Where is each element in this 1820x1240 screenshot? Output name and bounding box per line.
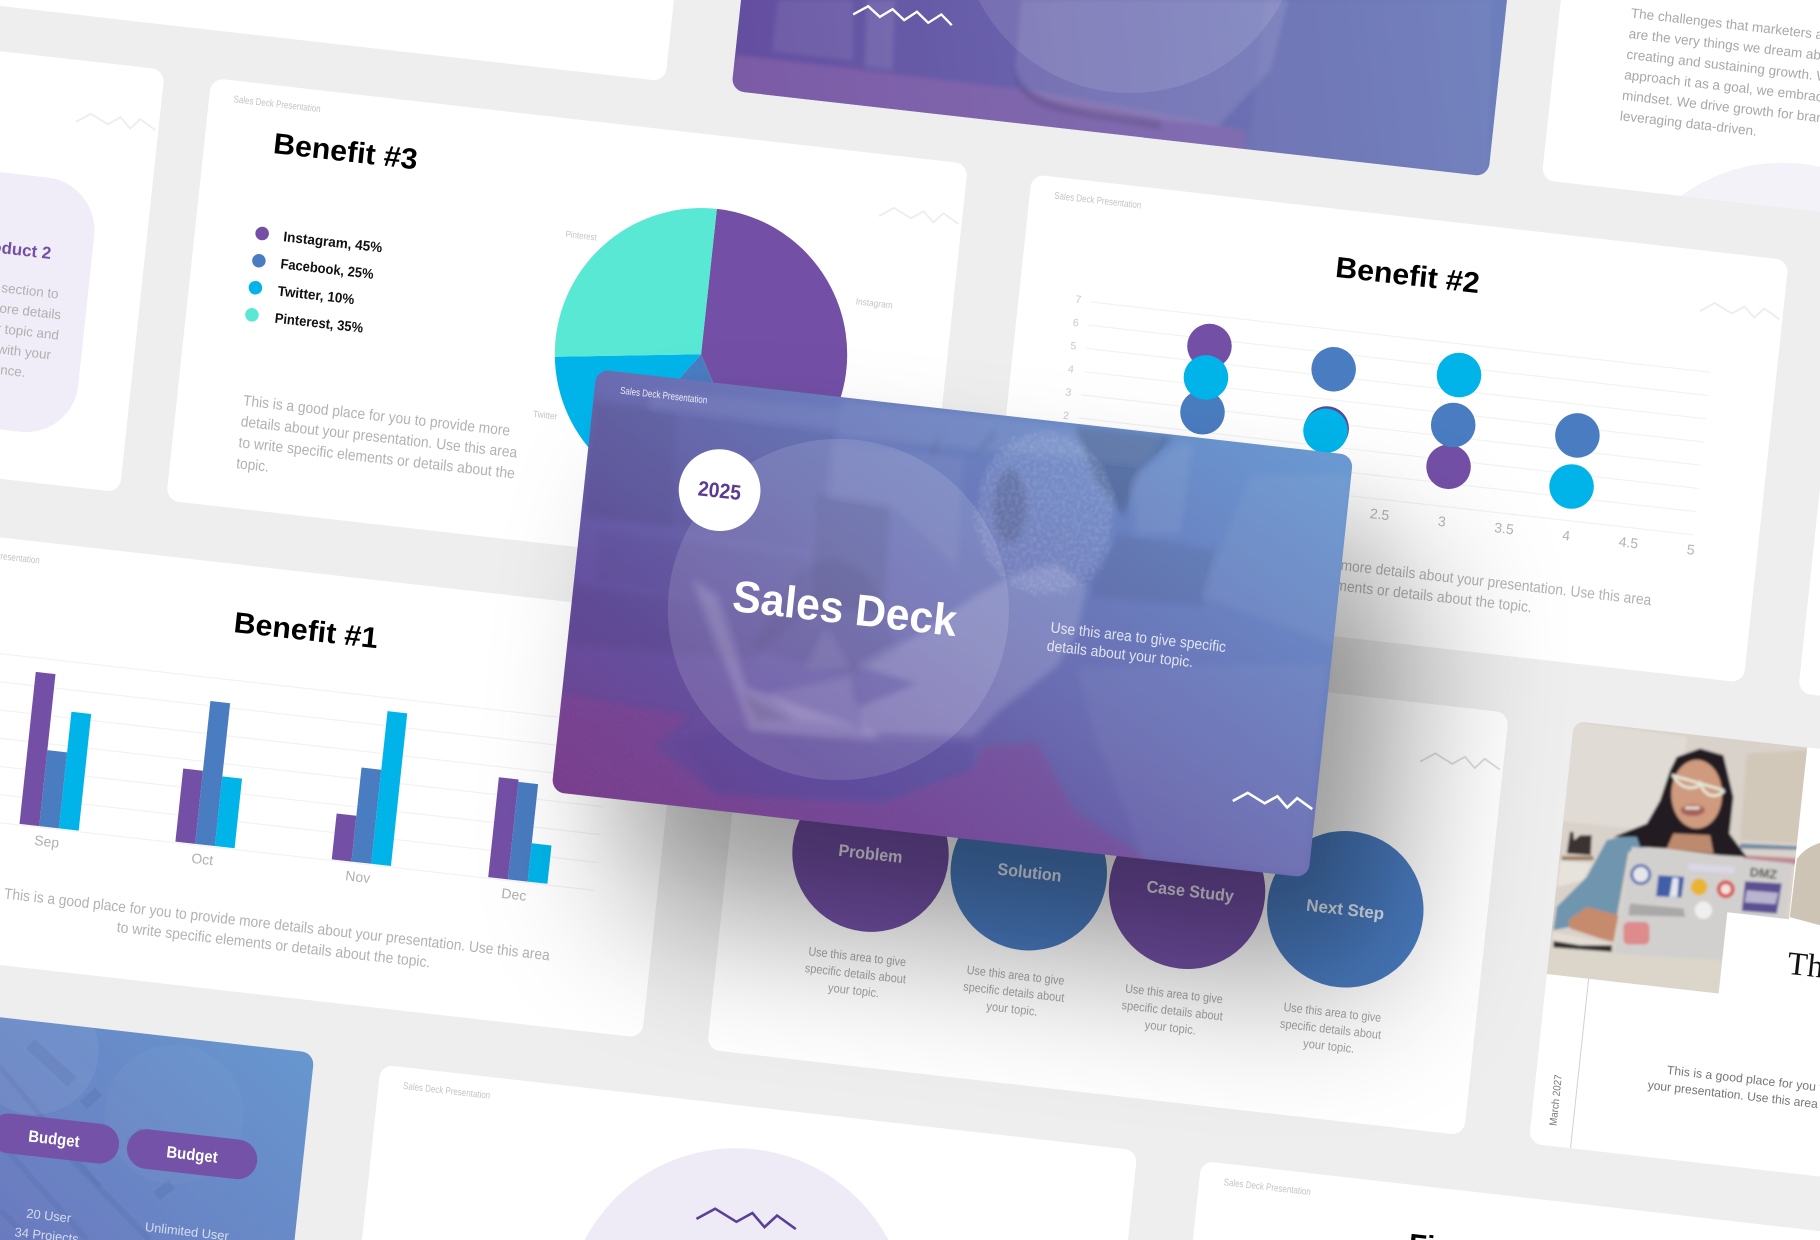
y axis labels: 4: [1067, 363, 1075, 376]
slide: team card base: [1529, 721, 1820, 1229]
team paragraph: [1647, 1061, 1820, 1113]
plant leaves: [930, 420, 998, 464]
big translucent circle: [668, 439, 1009, 780]
carpet tone: [552, 696, 1141, 858]
legend: [244, 225, 384, 337]
legend: Instagram, 45%: [283, 228, 384, 255]
x axis labels: 2.5: [1369, 505, 1390, 523]
zigzag: [76, 112, 156, 131]
x axis labels: 3.5: [1494, 519, 1515, 537]
subtitle: details about your topic.: [1046, 638, 1194, 671]
laptop: [693, 580, 878, 739]
paragraph: to write specific elements or details about the: [238, 434, 516, 483]
pie chart: [533, 208, 893, 500]
purple zigzag: [696, 1207, 797, 1231]
paragraph: [235, 392, 521, 503]
zigzag: [879, 206, 960, 225]
body text: leveraging data-driven.: [1619, 108, 1758, 139]
captions: your topic.: [827, 981, 880, 1000]
sofa cushions: [597, 531, 807, 613]
legend: Pinterest, 35%: [274, 310, 364, 336]
captions: your topic.: [1302, 1036, 1355, 1056]
lilac circle: [548, 1130, 926, 1240]
slide: top photo card: [720, 0, 1533, 177]
captions: Use this area to give: [1125, 981, 1224, 1006]
circle: case study: Case Study: [1146, 877, 1235, 906]
photo: woman with laptop: [1546, 722, 1808, 994]
dark wall gap: [1073, 427, 1173, 517]
paragraph: This is a good place for you to provide more details about your presentation. Use this area: [1105, 530, 1653, 609]
year badge: 2025: [697, 477, 742, 505]
top card photo shapes: [720, 0, 1492, 177]
curtain: [1133, 444, 1193, 534]
title: Sales Deck: [730, 572, 960, 646]
subtitle: [1046, 619, 1227, 675]
month labels: Sep: [34, 832, 60, 851]
bed front: [1077, 664, 1327, 877]
month labels: Nov: [345, 867, 371, 886]
slide: bottom centre: [336, 1065, 1138, 1240]
sweater: [860, 563, 1087, 737]
window band: [838, 401, 1161, 464]
diagonal photo stripes: [76, 1088, 174, 1188]
x axis labels: 4.5: [1618, 533, 1639, 551]
budget gradient: [0, 967, 315, 1240]
slide: far right blank: [1798, 271, 1820, 779]
budget pills and text: [0, 1111, 259, 1240]
x axis labels: 3: [1437, 513, 1447, 530]
x axis labels: 4: [1562, 527, 1571, 544]
month labels: [34, 832, 527, 904]
product text: [0, 273, 64, 383]
pie chart: Pinterest: [565, 229, 598, 242]
soft shadow of the main slide: [598, 416, 1423, 994]
deck label: Sales Deck Presentation: [402, 1081, 491, 1102]
hair tone: [978, 433, 1112, 593]
circle: next step: [1259, 823, 1431, 996]
body text: [1619, 6, 1820, 153]
captions: [802, 944, 1384, 1059]
captions: your topic.: [1144, 1018, 1197, 1037]
pie chart: Instagram: [855, 296, 893, 310]
y axis labels: 7: [1075, 294, 1082, 306]
date label: March 2027: [1547, 1074, 1565, 1126]
hands: [767, 677, 867, 727]
captions: specific details about: [1121, 998, 1224, 1023]
year badge: [675, 445, 765, 535]
legend: Twitter, 10%: [277, 283, 356, 307]
jeans: [750, 557, 900, 677]
cushion box: [1087, 534, 1218, 607]
circle: case study: [1101, 804, 1273, 977]
product panel: [0, 157, 100, 438]
hair curls: [975, 431, 1115, 596]
slide: process: [708, 692, 1508, 1134]
bar chart: [20, 671, 564, 884]
subtitle: Use this area to give specific: [1050, 619, 1227, 656]
deck label: Sales Deck Presentation: [1054, 191, 1142, 212]
top card circle: [978, 0, 1282, 93]
sofa back panels: [584, 401, 678, 527]
deck label: Sales Deck Presentation: [1223, 1177, 1311, 1198]
captions: specific details about: [1279, 1017, 1382, 1042]
captions: Use this area to give: [966, 963, 1065, 988]
top card gradient: [731, 0, 1533, 177]
circle: next step: Next Step: [1305, 896, 1385, 923]
captions: Use this area to give: [808, 944, 907, 969]
paragraph: topic.: [235, 455, 270, 476]
circle: solution: [943, 786, 1115, 959]
legend: Facebook, 25%: [280, 255, 375, 282]
x axis labels: [1369, 505, 1696, 558]
tablet: [810, 493, 890, 613]
paragraph: This is a good place for you to provide more: [242, 392, 511, 440]
y axis labels: 6: [1072, 317, 1080, 329]
light wall in circle: [831, 441, 963, 569]
y axis labels: 3: [1065, 386, 1072, 399]
zigzag: [1420, 752, 1501, 771]
floor cushion: [677, 726, 973, 801]
cover photo and gradient: [552, 370, 1352, 876]
y axis labels: 2: [1062, 410, 1070, 422]
captions: specific details about: [804, 961, 907, 986]
deck label: Sales Deck Presentation: [620, 386, 708, 407]
paragraph: This is a good place for you to provide more details about your presentation. Use this area: [3, 886, 551, 964]
budget pills and text: Budget: [27, 1127, 81, 1151]
carpet texture: [540, 693, 1161, 894]
slide: top-left blank: [0, 0, 710, 81]
captions: specific details about: [963, 979, 1066, 1005]
slide: benefit 2: [987, 174, 1789, 683]
paragraph: to write specific elements or details about the topic.: [116, 919, 431, 971]
slide: product 2: [0, 0, 165, 492]
slide: benefit 3: [166, 78, 968, 586]
captions: your topic.: [986, 999, 1038, 1019]
pie chart: Twitter: [533, 409, 558, 422]
face shade: [992, 468, 1027, 545]
pillow: [1203, 474, 1350, 647]
month labels: Oct: [191, 850, 214, 868]
y axis labels: [1062, 294, 1082, 422]
circle: problem: [784, 767, 957, 940]
budget pills and text: Budget: [166, 1143, 219, 1167]
dot plot: [1180, 324, 1600, 509]
slide: bottom right: [1156, 1161, 1820, 1240]
photo: woman with laptop: DMZ: [1749, 865, 1778, 882]
captions: Use this area to give: [1283, 1000, 1382, 1025]
paragraph: details about your presentation. Use this area: [240, 413, 518, 462]
top card zigzag: [853, 6, 952, 25]
deck label: Sales Deck Presentation: [233, 94, 321, 115]
faint circle: [1682, 163, 1820, 212]
main slide: Sales Deck cover: [552, 370, 1352, 876]
slide: top right text: [1543, 0, 1820, 212]
zigzag: [1700, 301, 1780, 321]
zigzag: [1233, 791, 1313, 810]
slide: benefit 1: [0, 529, 687, 1038]
heading: Benefit #1: [232, 607, 380, 655]
y axis labels: 5: [1070, 340, 1077, 353]
circle: problem: Problem: [838, 841, 903, 867]
photo: neighbouring shoulder: [1790, 843, 1820, 925]
x axis labels: 5: [1686, 541, 1696, 558]
heading: Benefit #3: [272, 128, 419, 176]
budget pills and text: 20 User: [26, 1206, 73, 1226]
paragraph: to write specific elements or details about the topic.: [1217, 564, 1533, 616]
month labels: Dec: [501, 885, 527, 904]
slide: budget: [0, 1017, 314, 1240]
circle: solution: Solution: [997, 860, 1062, 886]
heading: Benefit #2: [1334, 252, 1481, 300]
